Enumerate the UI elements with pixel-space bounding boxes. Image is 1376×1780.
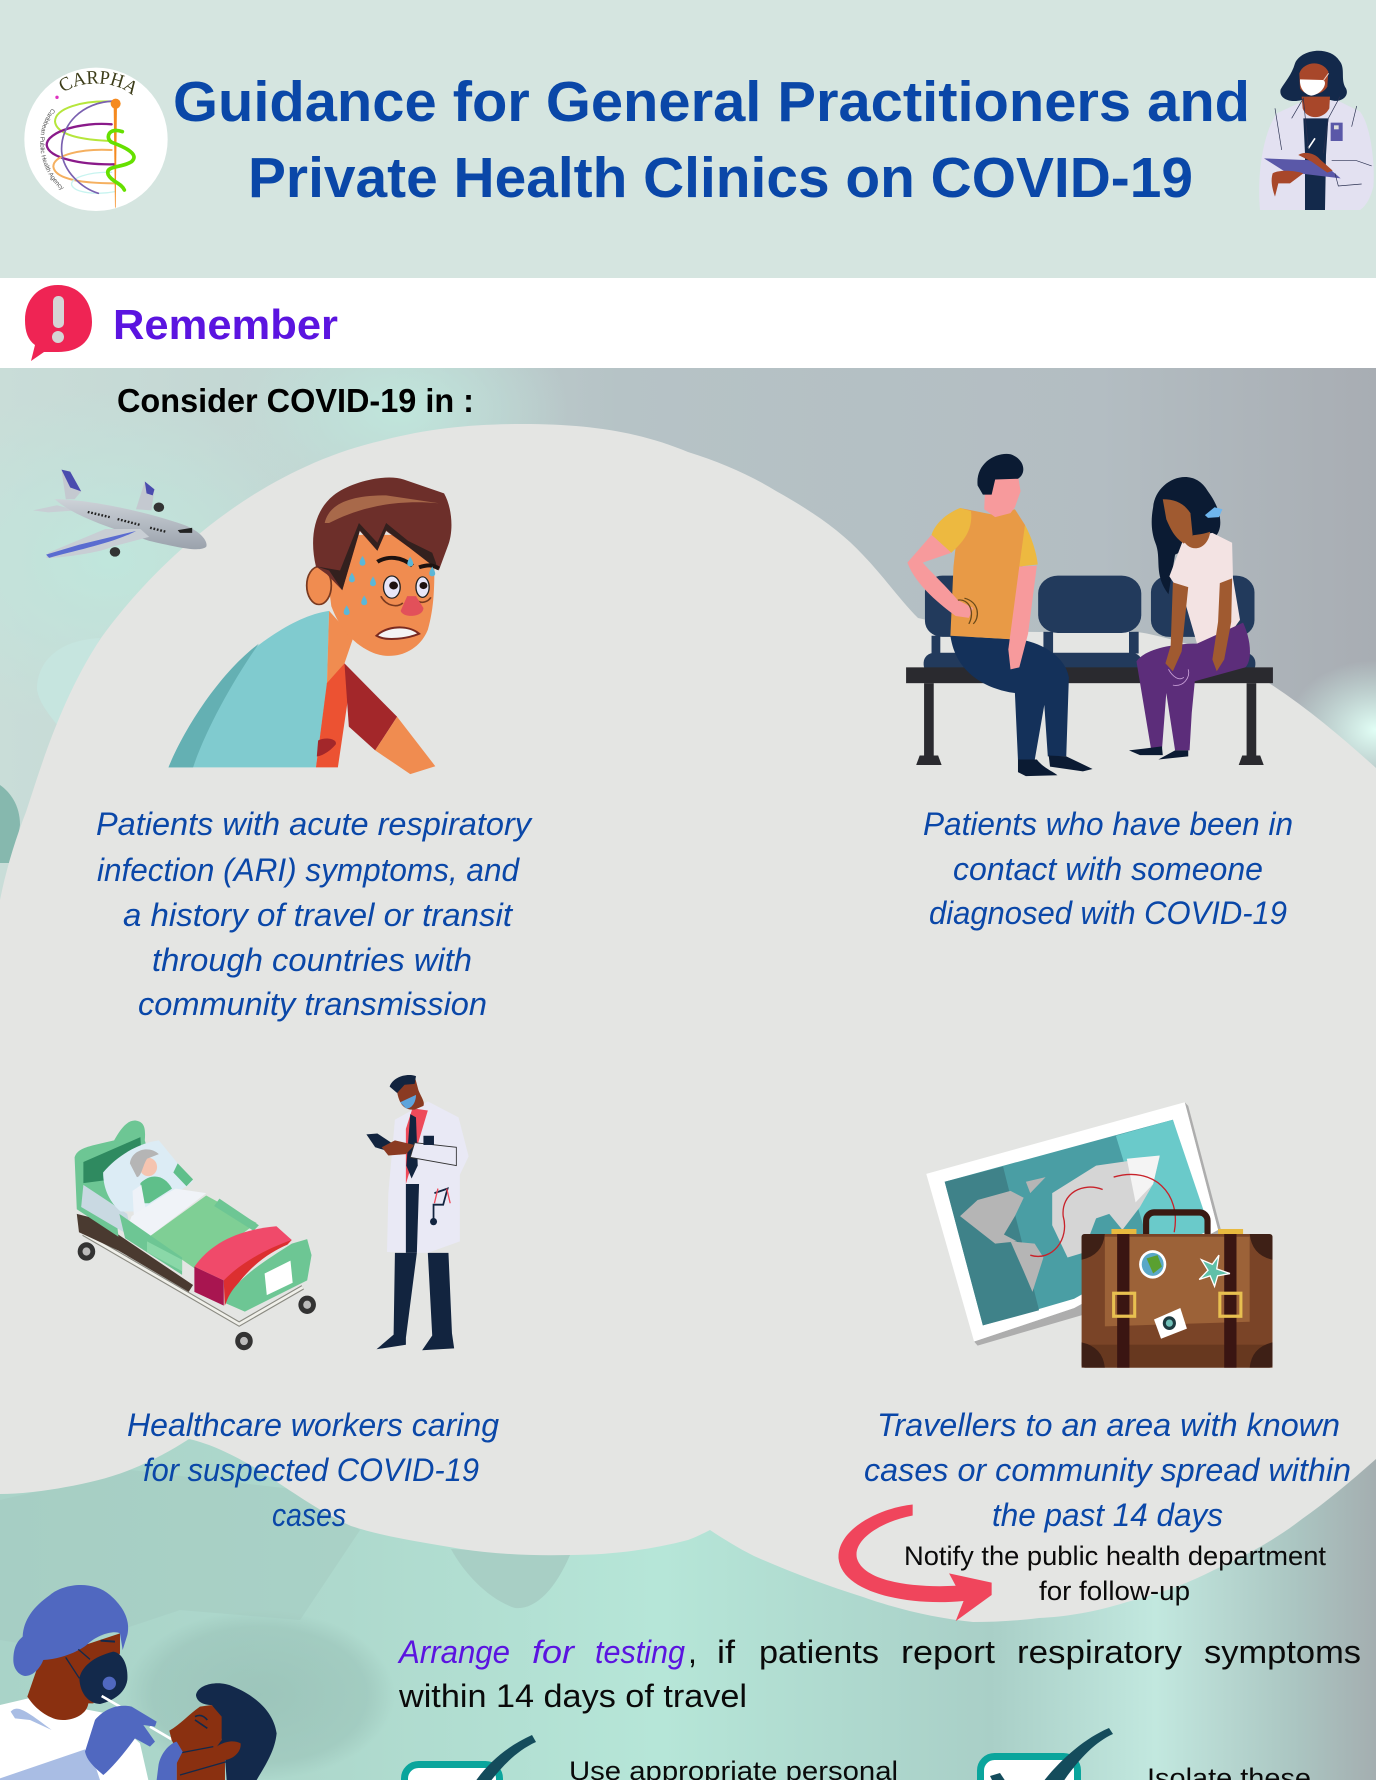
text: ARI patients: Patients with acute respiratory bbox=[96, 806, 533, 842]
logo: CARPHA bbox=[24, 68, 168, 211]
text: travellers bbox=[864, 1407, 1351, 1533]
panel: central light blob bbox=[0, 424, 1376, 1622]
text: travellers: the past 14 days bbox=[992, 1497, 1223, 1533]
title: Guidance for General Practitioners and bbox=[173, 70, 1250, 134]
text: contact patients bbox=[923, 806, 1293, 931]
text: notify public health department bbox=[904, 1541, 1327, 1606]
illustration: nurse swabbing patient bbox=[0, 1585, 277, 1780]
title bbox=[173, 70, 1250, 210]
icon: airplane bbox=[33, 470, 207, 558]
text: ARI patients bbox=[96, 806, 533, 1022]
icon: checkbox left bbox=[404, 1735, 536, 1780]
text: travellers: Travellers to an area with known bbox=[877, 1407, 1340, 1443]
text: contact patients: diagnosed with COVID-19 bbox=[929, 895, 1287, 931]
text: ARI patients: infection (ARI) symptoms, and bbox=[97, 852, 520, 888]
text: ARI patients: community transmission bbox=[138, 986, 487, 1022]
text: arrange for testing: for bbox=[532, 1634, 576, 1670]
text: arrange for testing: respiratory bbox=[1017, 1634, 1182, 1670]
text: ARI patients: a history of travel or transit bbox=[123, 897, 513, 933]
text: arrange for testing: patients bbox=[759, 1634, 879, 1670]
text: healthcare workers: for suspected COVID-19 bbox=[143, 1452, 479, 1488]
arrow: notify bbox=[838, 1505, 992, 1621]
illustration: sick boy sweating bbox=[168, 478, 451, 774]
panel: header background bbox=[0, 0, 1376, 278]
text: arrange for testing: symptoms bbox=[1204, 1634, 1361, 1670]
text: healthcare workers: cases bbox=[272, 1497, 346, 1533]
text: arrange for testing: within 14 days of travel bbox=[398, 1678, 747, 1714]
text: contact patients: contact with someone bbox=[953, 851, 1263, 887]
band: Remember background bbox=[0, 278, 1376, 368]
logo: CARPHA: Caribbean Public Health Agency bbox=[40, 109, 64, 190]
text: arrange for testing: Arrange bbox=[397, 1634, 510, 1670]
icon: checkbox right bbox=[980, 1728, 1113, 1780]
logo: CARPHA: CARPHA bbox=[60, 70, 135, 96]
illustration: two patients on waiting bench bbox=[906, 454, 1273, 776]
text: arrange for testing bbox=[397, 1634, 1361, 1714]
text: notify public health department: for follow-up bbox=[1039, 1576, 1190, 1606]
illustration: world map and suitcase bbox=[926, 1102, 1272, 1368]
illustration: doctor with tablet bbox=[366, 1075, 469, 1350]
text: arrange for testing: if bbox=[717, 1634, 735, 1670]
text: notify public health department: Notify the public health department bbox=[904, 1541, 1327, 1571]
text: arrange for testing: , bbox=[688, 1634, 697, 1670]
text: arrange for testing: testing bbox=[595, 1634, 685, 1670]
heading: Remember: Remember bbox=[113, 301, 338, 348]
illustration: hospital bed with patient bbox=[75, 1121, 316, 1350]
text: ARI patients: through countries with bbox=[152, 942, 472, 978]
title: Private Health Clinics on COVID-19 bbox=[248, 146, 1193, 210]
heading: Consider COVID-19 in: Consider COVID-19 in : bbox=[117, 382, 474, 419]
text: healthcare workers: Healthcare workers caring bbox=[127, 1407, 499, 1443]
text: travellers: cases or community spread within bbox=[864, 1452, 1351, 1488]
text: healthcare workers bbox=[127, 1407, 499, 1533]
text: contact patients: Patients who have been in bbox=[923, 806, 1293, 842]
text: arrange for testing: report bbox=[901, 1634, 995, 1670]
illustration: doctor with clipboard bbox=[1259, 51, 1374, 210]
icon: exclamation speech bubble bbox=[25, 285, 92, 361]
